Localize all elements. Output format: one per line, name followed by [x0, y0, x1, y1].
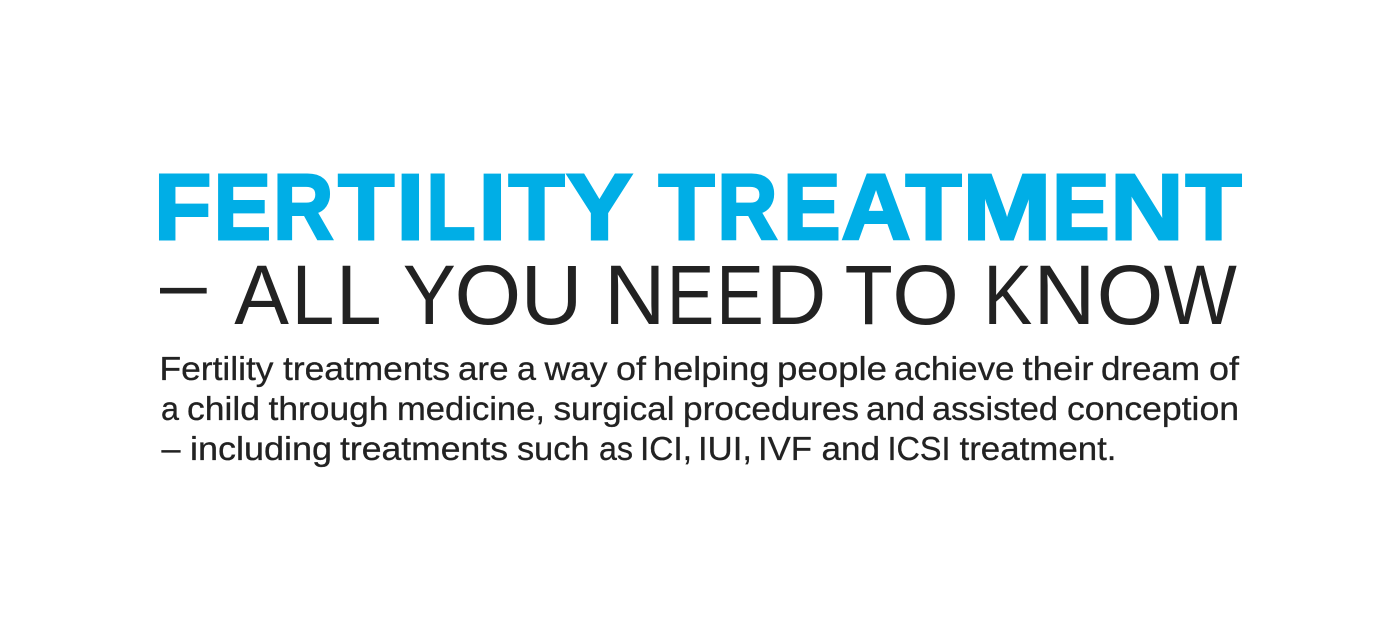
subtitle words: U	[521, 248, 582, 342]
body line 2: procedures	[683, 391, 859, 428]
body line 3: IVF	[758, 431, 812, 468]
body line 1: a	[517, 351, 536, 388]
body line 2: assisted	[932, 391, 1058, 428]
title: fertility treatment: E	[1052, 155, 1109, 259]
title: fertility treatment: I	[397, 155, 424, 259]
subtitle words: E	[716, 248, 764, 342]
body line 1: dream	[1101, 351, 1200, 388]
body line 2: and	[866, 391, 925, 428]
body line 2: child	[187, 391, 260, 428]
body line 1: achieve	[894, 351, 1014, 388]
body line 3: IUI,	[698, 431, 752, 468]
subtitle words: L	[336, 248, 379, 342]
body line 2: medicine,	[397, 391, 545, 428]
title: fertility treatment: A	[842, 155, 910, 259]
title: fertility treatment: R	[273, 155, 333, 259]
subtitle words: L	[292, 248, 334, 342]
body line 1: their	[1022, 351, 1094, 388]
title: fertility treatment: T	[906, 155, 962, 259]
body line 1: of	[616, 351, 647, 388]
body line 3: treatments	[340, 431, 508, 468]
body line 3: such	[517, 431, 590, 468]
subtitle words: T	[845, 248, 893, 342]
body line 1: treatments	[283, 351, 450, 388]
body line 1: way	[543, 351, 608, 388]
subtitle dash: –	[160, 236, 207, 330]
title: fertility treatment: T	[338, 155, 394, 259]
body text	[160, 351, 1240, 468]
subtitle words: Y	[403, 248, 456, 342]
subtitle words: N	[1034, 248, 1095, 342]
body line 3: as	[599, 431, 633, 468]
title: fertility treatment: F	[154, 155, 211, 259]
title: fertility treatment: M	[963, 155, 1051, 259]
body line 2: surgical	[554, 391, 674, 428]
body line 2: through	[268, 391, 388, 428]
title: fertility treatment: T	[1186, 155, 1242, 259]
title: fertility treatment: I	[479, 155, 506, 259]
subtitle words: N	[604, 248, 666, 342]
body line 3: ICSI	[888, 431, 950, 468]
title: fertility treatment: N	[1110, 155, 1184, 259]
title: fertility treatment: T	[509, 155, 564, 259]
body line 3: and	[822, 431, 880, 468]
subtitle words: O	[454, 248, 521, 342]
title: fertility treatment: L	[426, 155, 476, 259]
title: fertility treatment: R	[717, 155, 777, 259]
subtitle words: W	[1164, 248, 1237, 342]
body line 3: treatment.	[960, 431, 1116, 468]
subtitle words: A	[234, 248, 289, 342]
body line 3: including	[190, 431, 332, 468]
title: fertility treatment: Y	[567, 155, 631, 259]
body line 1: of	[1209, 351, 1240, 388]
body line 3: –	[162, 431, 181, 468]
body line 1: Fertility	[160, 351, 274, 388]
title: fertility treatment: T	[659, 155, 714, 259]
subtitle words: O	[892, 248, 959, 342]
title: fertility treatment: E	[783, 155, 840, 259]
body line 3: ICI,	[640, 431, 692, 468]
body line 2: a	[161, 391, 179, 428]
body line 1: are	[458, 351, 508, 388]
title: fertility treatment: E	[214, 155, 271, 259]
body line 1: helping	[653, 351, 770, 388]
subtitle words: K	[983, 248, 1032, 342]
subtitle words: E	[667, 248, 714, 342]
subtitle words: D	[766, 248, 826, 342]
subtitle: all you need to know	[160, 236, 1237, 342]
body line 1: people	[777, 351, 887, 388]
subtitle words: O	[1097, 248, 1163, 342]
body line 2: conception	[1067, 391, 1239, 428]
